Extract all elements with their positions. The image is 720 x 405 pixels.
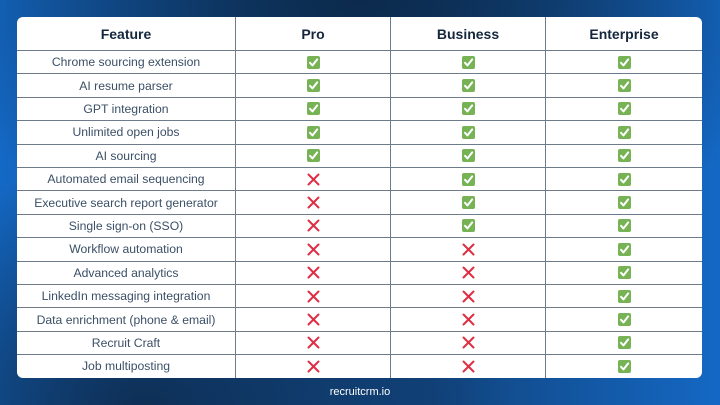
- rows: Chrome sourcing extension: [52, 55, 200, 69]
- rows: Automated email sequencing: [47, 172, 205, 186]
- rows: Recruit Craft: [92, 336, 160, 350]
- header row: Enterprise: [589, 26, 659, 42]
- rows: Job multiposting: [82, 359, 170, 373]
- rows: LinkedIn messaging integration: [42, 289, 210, 303]
- header row: Pro: [301, 26, 325, 42]
- footer: recruitcrm.io: [330, 386, 390, 398]
- rows: GPT integration: [83, 102, 169, 116]
- rows: AI sourcing: [96, 149, 156, 163]
- rows: Workflow automation: [69, 242, 183, 256]
- header row: [101, 17, 659, 50]
- header row: Feature: [101, 26, 151, 42]
- rows: Data enrichment (phone & email): [37, 313, 215, 327]
- rows: Unlimited open jobs: [72, 125, 180, 139]
- rows: Single sign-on (SSO): [69, 219, 183, 233]
- rows: Advanced analytics: [73, 266, 178, 280]
- rows: AI resume parser: [79, 79, 173, 93]
- header row: Business: [437, 26, 499, 42]
- rows: Executive search report generator: [34, 196, 218, 210]
- rows: [17, 50, 702, 378]
